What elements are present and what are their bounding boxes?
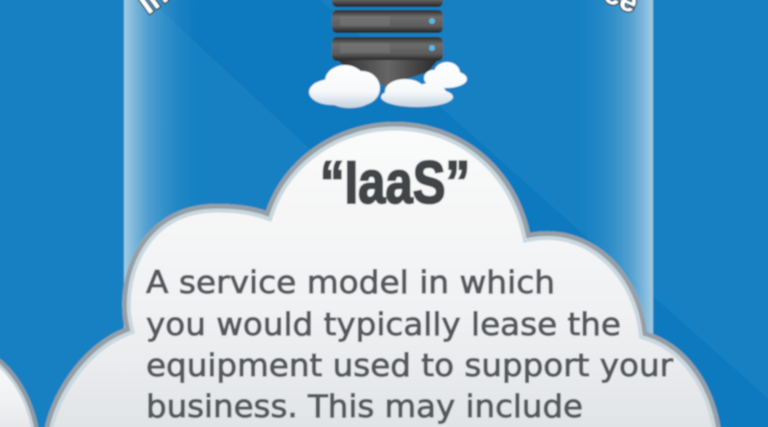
- panel: IaaS cloud: [43, 122, 722, 427]
- server unit: top: [332, 0, 443, 7]
- server unit: lower: [332, 37, 443, 61]
- body text: equipment used to support your: [146, 348, 673, 384]
- icon: server stack on clouds: [309, 0, 467, 108]
- light column: right edge: [571, 0, 653, 335]
- heading: “IaaS”: [320, 149, 470, 216]
- body text: you would typically lease the: [146, 307, 621, 343]
- body text: business. This may include: [146, 389, 583, 425]
- small cloud: left: [309, 65, 380, 108]
- cloud shape: [43, 122, 722, 427]
- body text: [146, 265, 673, 425]
- light column: left edge: [124, 0, 206, 340]
- server unit: middle: [332, 10, 443, 33]
- body text: A service model in which: [146, 265, 555, 301]
- cloud: left neighbour: [0, 357, 40, 427]
- small cloud: middle: [381, 79, 453, 107]
- server base cone: [337, 60, 438, 88]
- small cloud: right: [424, 62, 467, 88]
